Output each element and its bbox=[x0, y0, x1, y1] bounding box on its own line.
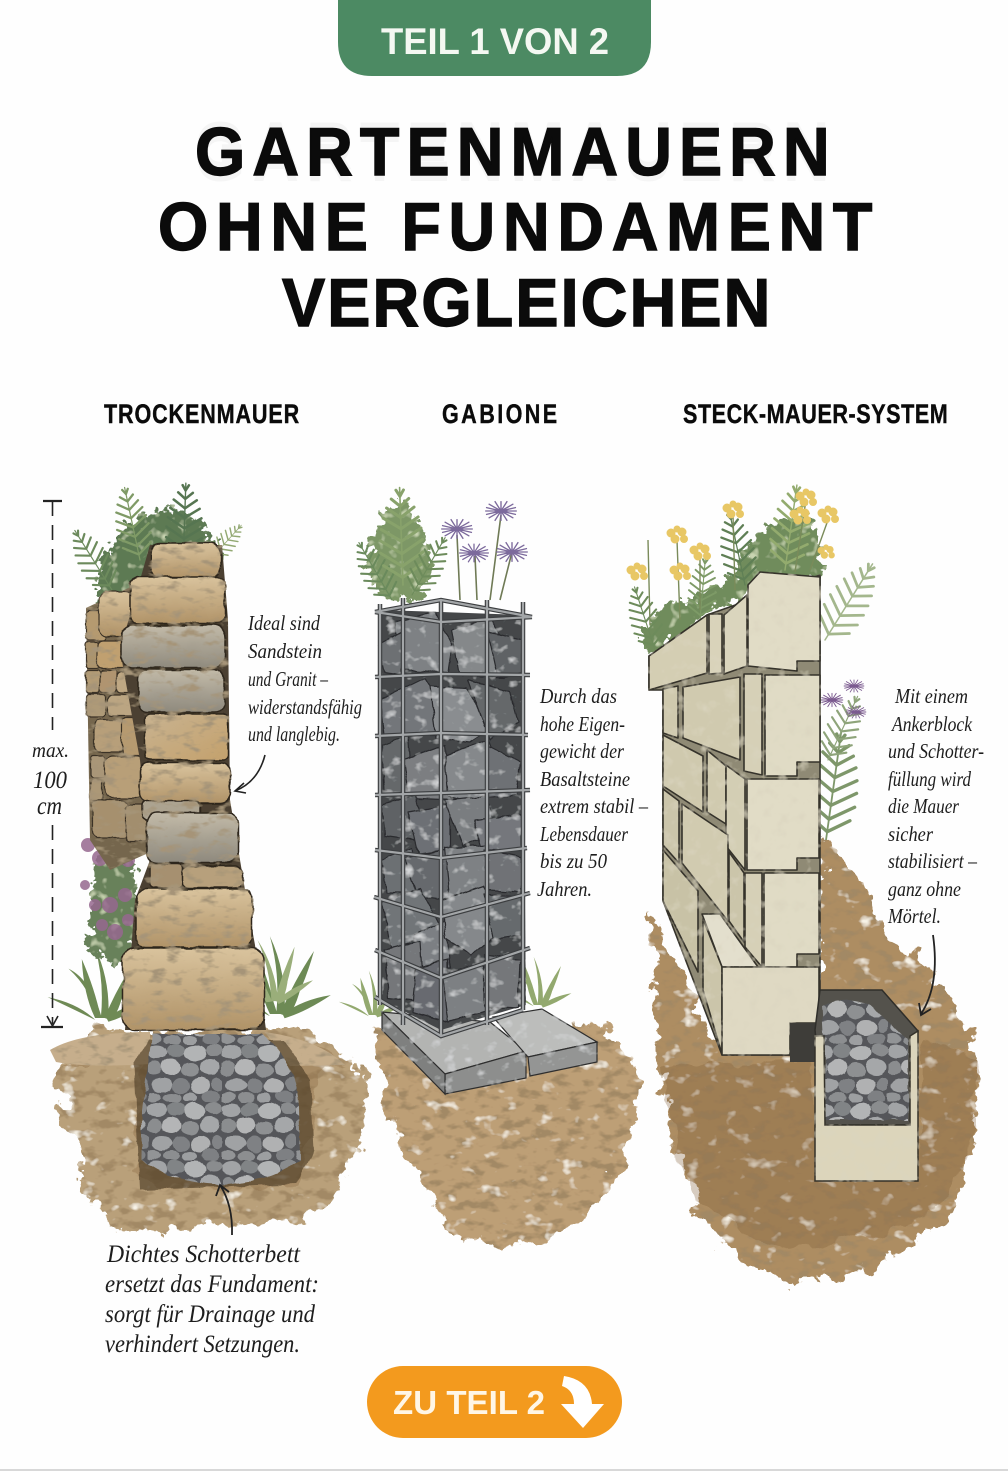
title bbox=[158, 109, 872, 341]
note: gabion weight: bis zu 50 bbox=[540, 849, 607, 873]
concrete slabs bbox=[382, 1009, 597, 1094]
note: gabion weight: Lebensdauer bbox=[539, 822, 629, 846]
note: anchor block: ganz ohne bbox=[888, 877, 961, 901]
note: gravel bed: sorgt für Drainage und bbox=[105, 1301, 315, 1328]
title: OHNE FUNDAMENT bbox=[158, 190, 872, 265]
note: gravel bed: Dichtes Schotterbett bbox=[106, 1241, 301, 1268]
back row stones bbox=[86, 585, 160, 870]
heading: Gabione: GABIONE bbox=[442, 400, 557, 430]
heading: Trockenmauer: TROCKENMAUER bbox=[104, 400, 300, 430]
gabion stones bbox=[378, 610, 526, 1030]
note: anchor block: Ankerblock bbox=[890, 712, 973, 736]
note: anchor block: sicher bbox=[888, 822, 934, 846]
illustration: Trockenmauer bbox=[48, 483, 364, 1232]
note: gravel bed: ersetzt das Fundament: bbox=[105, 1271, 319, 1298]
note: stone material: widerstandsfähig bbox=[248, 695, 362, 719]
note: stone material: und Granit – bbox=[248, 667, 328, 691]
title: GARTENMAUERN bbox=[195, 115, 830, 190]
note: anchor block: füllung wird bbox=[888, 767, 971, 791]
grass and flowers at wall foot bbox=[48, 834, 331, 1022]
title: GARTENMAUERN bbox=[195, 109, 830, 184]
foliage and flowers bbox=[339, 487, 571, 1017]
note: gravel bed bbox=[105, 1241, 319, 1358]
note: gabion weight: Durch das bbox=[539, 684, 617, 708]
note: anchor block: und Schotter- bbox=[888, 739, 984, 763]
note: anchor block: Mörtel. bbox=[887, 904, 941, 928]
illustration: Steck-Mauer-System bbox=[621, 482, 977, 1281]
arrow: note to wall stone bbox=[235, 755, 265, 793]
anchor trough with gravel bbox=[790, 990, 918, 1181]
note: gabion weight: hohe Eigen- bbox=[540, 712, 625, 736]
front stones bbox=[120, 543, 266, 1030]
note: stone material: Sandstein bbox=[248, 639, 322, 663]
dimension label: max. bbox=[32, 738, 69, 762]
note: gabion weight bbox=[537, 684, 648, 901]
soil bbox=[372, 1020, 640, 1245]
soil bbox=[650, 840, 977, 1281]
note: gabion weight: gewicht der bbox=[540, 739, 625, 763]
dimension label bbox=[32, 738, 69, 820]
note: gabion weight: Jahren. bbox=[537, 877, 592, 901]
title: GARTENMAUERN bbox=[195, 121, 830, 196]
note: stone material: Ideal sind bbox=[247, 611, 320, 635]
title: VERGLEICHEN bbox=[282, 266, 770, 341]
note: anchor block: die Mauer bbox=[888, 794, 960, 818]
foliage bbox=[621, 482, 889, 843]
note: anchor block bbox=[887, 684, 984, 928]
arrow: note to trough bbox=[919, 935, 935, 1015]
note: stone material: und langlebig. bbox=[248, 722, 340, 746]
button: to part 2 bbox=[367, 1366, 622, 1438]
gravel bed bbox=[142, 1034, 300, 1185]
arrow: note to gravel bed bbox=[216, 1185, 232, 1235]
height dimension line bbox=[41, 501, 63, 1027]
icon: curved arrow bbox=[561, 1376, 604, 1428]
illustration: Gabione bbox=[339, 487, 640, 1245]
note: stone material bbox=[247, 611, 362, 746]
note: gravel bed: verhindert Setzungen. bbox=[105, 1331, 300, 1358]
dimension label: 100 bbox=[33, 767, 67, 794]
wire cage bbox=[374, 598, 532, 1036]
dimension label: cm bbox=[37, 793, 62, 820]
heading: Steck-Mauer-System: STECK-MAUER-SYSTEM bbox=[683, 400, 948, 430]
button: to part 2: ZU TEIL 2 bbox=[393, 1384, 545, 1421]
note: anchor block: Mit einem bbox=[894, 684, 968, 708]
plants on top of dry wall bbox=[62, 483, 249, 600]
top tab: part label: TEIL 1 VON 2 bbox=[381, 21, 609, 62]
top tab: part label bbox=[338, 0, 651, 76]
soil with trench bbox=[50, 1030, 364, 1232]
note: anchor block: stabilisiert – bbox=[888, 849, 977, 873]
note: gabion weight: extrem stabil – bbox=[540, 794, 648, 818]
note: gabion weight: Basaltsteine bbox=[540, 767, 630, 791]
concrete blocks bbox=[649, 572, 820, 1055]
